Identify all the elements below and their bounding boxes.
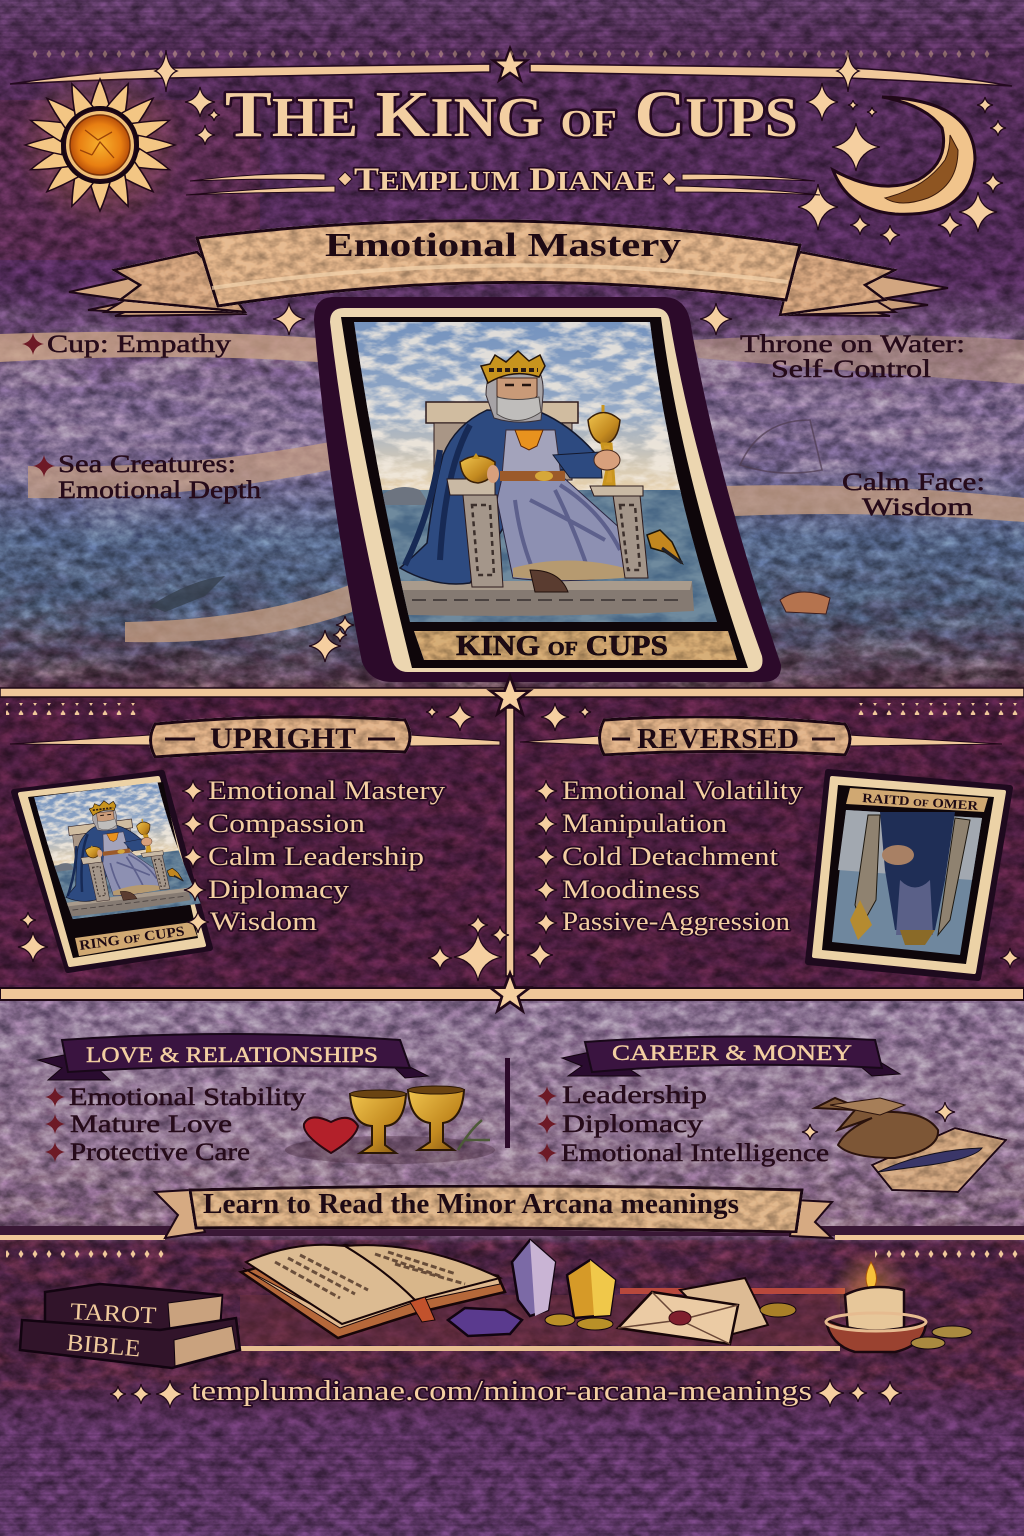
dividers: section frame bbox=[0, 676, 1024, 1011]
stars beside card bbox=[273, 303, 732, 662]
title: THE KING OF CUPS bbox=[225, 78, 798, 151]
small card: reversed bbox=[808, 772, 1010, 978]
banner: Emotional Mastery bbox=[69, 221, 948, 316]
list: reversed meanings: Passive-Aggression bbox=[562, 907, 790, 936]
list: upright meanings: Compassion bbox=[208, 809, 365, 838]
callout: Calm Face bbox=[842, 469, 985, 521]
sea ribbons bbox=[0, 332, 1024, 642]
icon: envelope bbox=[618, 1278, 796, 1344]
title stars bbox=[185, 87, 220, 145]
small card: upright bbox=[14, 773, 210, 970]
banner: call to action bbox=[155, 1186, 832, 1238]
list: career bbox=[537, 1082, 829, 1167]
subtitle: Templum Dianae: TEMPLUM DIANAE bbox=[354, 162, 656, 198]
subtitle: Templum Dianae bbox=[186, 162, 820, 198]
small card: reversed: RAITD OF OMER bbox=[862, 790, 979, 813]
icon: tarot and bible books: BIBLE bbox=[65, 1330, 141, 1362]
separator bbox=[505, 1058, 510, 1148]
icon: crystals and gems bbox=[448, 1240, 615, 1336]
top frame bbox=[10, 48, 1012, 92]
callout: Cup bbox=[22, 331, 232, 358]
heading: Reversed: REVERSED bbox=[637, 723, 799, 755]
list: reversed meanings: Cold Detachment bbox=[562, 842, 779, 871]
callout: Calm Face: Wisdom bbox=[862, 494, 974, 521]
small card: upright: RING OF CUPS bbox=[78, 924, 186, 954]
banner: call to action: Learn to Read the Minor Arcana meanings bbox=[203, 1189, 739, 1220]
list: reversed meanings: Manipulation bbox=[562, 809, 727, 838]
website link bbox=[110, 1375, 902, 1408]
list: upright meanings: Diplomacy bbox=[208, 875, 349, 904]
icon: tarot and bible books: TAROT bbox=[70, 1299, 157, 1330]
icon: pouch, paper and pen bbox=[802, 1098, 1006, 1192]
callout: Throne on Water: Self-Control bbox=[771, 356, 931, 383]
list: upright meanings: Emotional Mastery bbox=[208, 776, 445, 805]
heading: Upright bbox=[10, 717, 500, 757]
callout: Cup: Cup: Empathy bbox=[47, 331, 232, 358]
heading: Upright: UPRIGHT bbox=[210, 722, 356, 755]
list: career: Leadership bbox=[562, 1082, 707, 1109]
list: reversed meanings: Moodiness bbox=[562, 875, 700, 904]
icon: heart and goblets bbox=[285, 1086, 495, 1164]
list: upright meanings bbox=[182, 776, 445, 936]
ribbon: Love &amp; Relationships bbox=[38, 1034, 428, 1080]
callout: Sea Creatures: Emotional Depth bbox=[58, 477, 262, 504]
list: reversed meanings bbox=[535, 776, 803, 936]
callout: Throne on Water: Throne on Water: bbox=[740, 331, 965, 358]
icon: sun bbox=[15, 60, 185, 230]
list: love: Mature Love bbox=[70, 1111, 232, 1138]
shelf lines bbox=[240, 1288, 845, 1351]
banner: Emotional Mastery: Emotional Mastery bbox=[325, 227, 681, 264]
heading: Reversed bbox=[520, 717, 1002, 755]
website link: templumdianae.com/minor-arcana-meanings bbox=[191, 1375, 812, 1407]
main tarot card: KING OF CUPS bbox=[456, 630, 668, 662]
icon: candle bbox=[826, 1250, 972, 1352]
ribbon: Career &amp; Money: CAREER & MONEY bbox=[612, 1040, 852, 1065]
callout: Sea Creatures: Sea Creatures: bbox=[58, 451, 236, 478]
callout: Calm Face: Calm Face: bbox=[842, 469, 985, 496]
list: upright meanings: Wisdom bbox=[210, 907, 317, 936]
callout: Throne on Water bbox=[740, 331, 965, 383]
list: love: Protective Care bbox=[70, 1139, 250, 1166]
main tarot card bbox=[314, 297, 781, 682]
icon: crescent moon bbox=[798, 83, 1006, 245]
ribbon: Love &amp; Relationships: LOVE & RELATIONSHIPS bbox=[86, 1042, 378, 1067]
list: career: Diplomacy bbox=[562, 1111, 704, 1138]
ribbon: Career &amp; Money bbox=[562, 1036, 900, 1076]
icon: tarot and bible books bbox=[20, 1284, 240, 1368]
stars: lower section bbox=[18, 912, 1020, 981]
list: love bbox=[45, 1084, 307, 1166]
list: love: Emotional Stability bbox=[69, 1084, 307, 1111]
divider: lower rule bbox=[0, 1226, 1024, 1258]
list: career: Emotional Intelligence bbox=[561, 1140, 829, 1167]
list: reversed meanings: Emotional Volatility bbox=[562, 776, 803, 805]
list: upright meanings: Calm Leadership bbox=[208, 842, 424, 871]
icon: open book bbox=[241, 1245, 505, 1338]
callout: Sea Creatures bbox=[33, 451, 262, 504]
